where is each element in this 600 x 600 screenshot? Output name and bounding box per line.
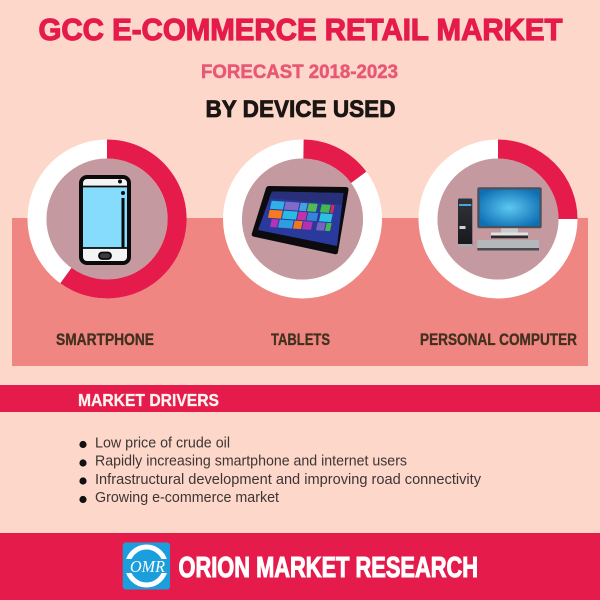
list: market drivers: Rapidly increasing smartphone and internet users (95, 452, 407, 470)
title: GCC E-COMMERCE RETAIL MARKET (38, 12, 563, 47)
footer band (0, 533, 600, 600)
donut: smartphone (37, 149, 177, 289)
banner: market drivers: MARKET DRIVERS (78, 390, 219, 410)
donut: personal computer (428, 149, 568, 289)
list: market drivers: Infrastructural development and improving road connectivity (95, 471, 481, 488)
icon: desktop computer (458, 187, 542, 250)
donut: tablets (232, 149, 372, 289)
icon: tablet (252, 186, 349, 254)
subtitle: forecast period: FORECAST 2018-2023 (201, 62, 398, 83)
label: smartphone: SMARTPHONE (56, 331, 154, 349)
icon: orion logo (123, 542, 170, 590)
list: market drivers: Growing e-commerce market (95, 489, 280, 506)
label: tablets: TABLETS (271, 331, 330, 349)
icon: smartphone (81, 177, 129, 263)
list: market drivers (79, 434, 481, 506)
heading: by device used: BY DEVICE USED (206, 96, 396, 123)
panel: device band (12, 218, 588, 366)
footer brand name: ORION MARKET RESEARCH (178, 552, 478, 584)
list: market drivers: Low price of crude oil (95, 434, 230, 452)
banner: market drivers (0, 385, 600, 412)
icon: orion logo: OMR (130, 557, 166, 576)
